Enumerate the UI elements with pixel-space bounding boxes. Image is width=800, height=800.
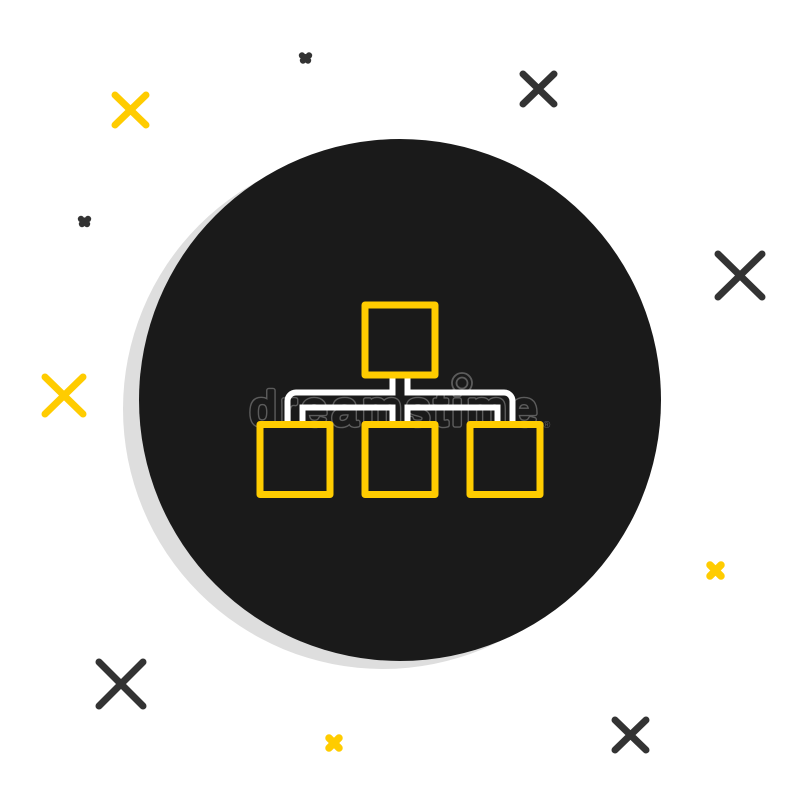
black circle: [139, 139, 661, 661]
icon: hierarchy boxes: [260, 305, 540, 494]
small yellow cross right: [710, 565, 721, 576]
dark cross right: [718, 254, 762, 297]
yellow cross top left: [115, 95, 146, 125]
dark cross bottom right: [615, 720, 646, 750]
watermark: dreamstime: [250, 382, 537, 435]
icon: connector lines: [288, 378, 512, 421]
small yellow cross bottom: [329, 738, 339, 748]
watermark: dreamstime: [250, 382, 537, 435]
small dark mark left: [78, 216, 91, 227]
dark cross top right: [523, 74, 554, 104]
circle shadow: [123, 149, 643, 669]
small dark mark top: [299, 52, 312, 64]
watermark: ®: [543, 420, 551, 431]
yellow cross left: [45, 377, 83, 414]
dark cross bottom left: [99, 662, 143, 706]
